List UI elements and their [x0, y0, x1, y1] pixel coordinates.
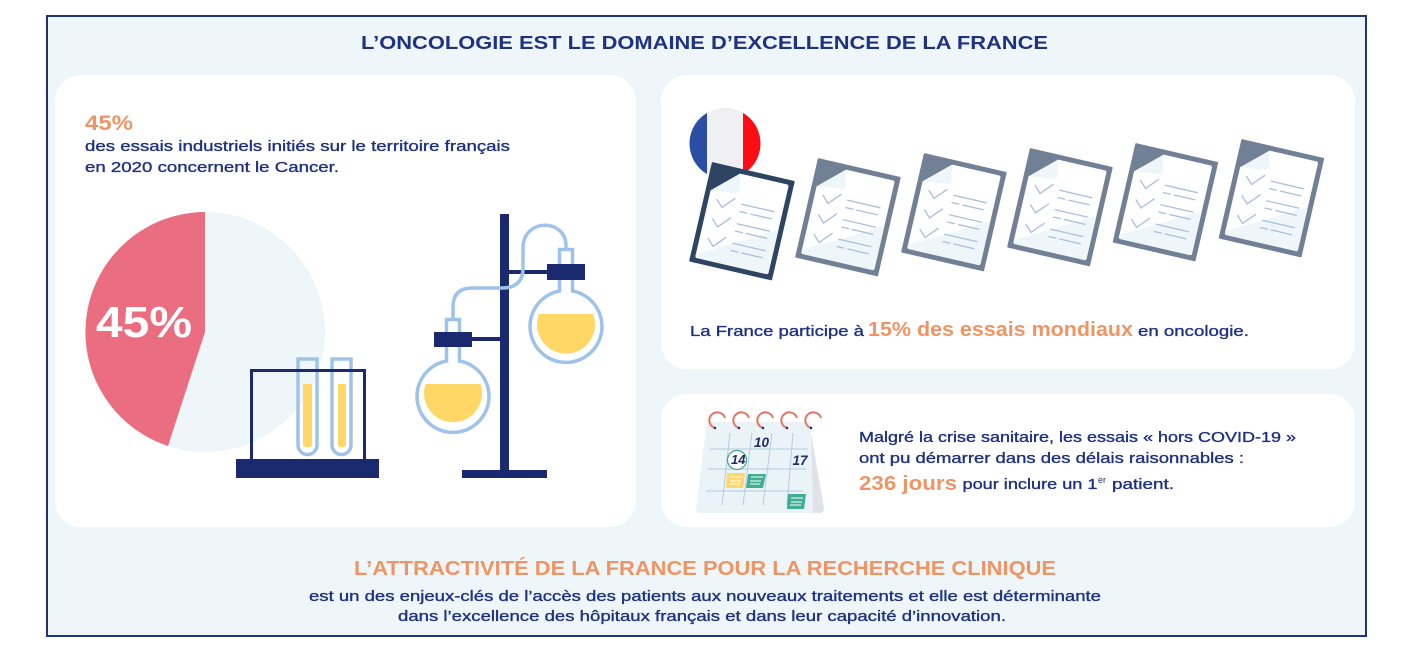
icon: calendar [696, 412, 824, 513]
statistic text: 15% des essais mondiaux [868, 319, 1133, 341]
icon: document 4 [1007, 148, 1113, 267]
delay text: Malgré la crise sanitaire, les essais « hors COVID-19 » [859, 429, 1296, 446]
delay text: pour inclure un 1 [962, 476, 1098, 493]
statistic text: La France participe à [690, 323, 865, 340]
icon: French flag [689, 108, 761, 180]
conclusion text [309, 588, 1101, 625]
delay text [859, 429, 1296, 495]
conclusion heading: L’ATTRACTIVITÉ DE LA FRANCE POUR LA RECHERCHE CLINIQUE [354, 557, 1056, 580]
conclusion text: dans l’excellence des hôpitaux français et dans leur capacité d’innovation. [398, 608, 1006, 625]
conclusion text: est un des enjeux-clés de l’accès des patients aux nouveaux traitements et elle est déterminante [309, 588, 1101, 605]
panel background [661, 394, 1355, 527]
pie chart [85, 212, 325, 452]
icon: calendar: 14 [731, 452, 746, 467]
icon: test tube rack [236, 359, 379, 478]
icon: document 5 [1113, 143, 1218, 262]
icon: document 2 [795, 158, 901, 277]
panel background [661, 75, 1355, 369]
panel: 15% of world trials [661, 75, 1355, 369]
panel: delay to first patient [661, 394, 1355, 527]
statistic text: en oncologie. [1138, 323, 1249, 340]
delay text: patient. [1112, 476, 1174, 493]
pie chart: 45% [96, 298, 192, 347]
icon: calendar: 10 [754, 435, 770, 450]
delay text: 236 jours [859, 473, 957, 495]
icon: highlighted document [689, 162, 795, 281]
icon: flasks on stand [417, 214, 602, 478]
icon: document 3 [901, 153, 1007, 272]
panel background [55, 75, 636, 527]
statistic text [690, 319, 1249, 341]
icon: document 6 [1219, 139, 1324, 258]
delay text: ont pu démarrer dans des délais raisonnables : [859, 450, 1244, 467]
icon: calendar: 17 [792, 453, 809, 468]
statistic text: des essais industriels initiés sur le territoire français [85, 138, 510, 155]
panel: 45% of trials [55, 75, 636, 527]
statistic text: 45% [85, 112, 133, 135]
delay text: er [1098, 475, 1106, 485]
title: L’ONCOLOGIE EST LE DOMAINE D’EXCELLENCE DE LA FRANCE [361, 33, 1048, 53]
statistic text: en 2020 concernent le Cancer. [85, 159, 339, 176]
statistic text [85, 112, 510, 176]
